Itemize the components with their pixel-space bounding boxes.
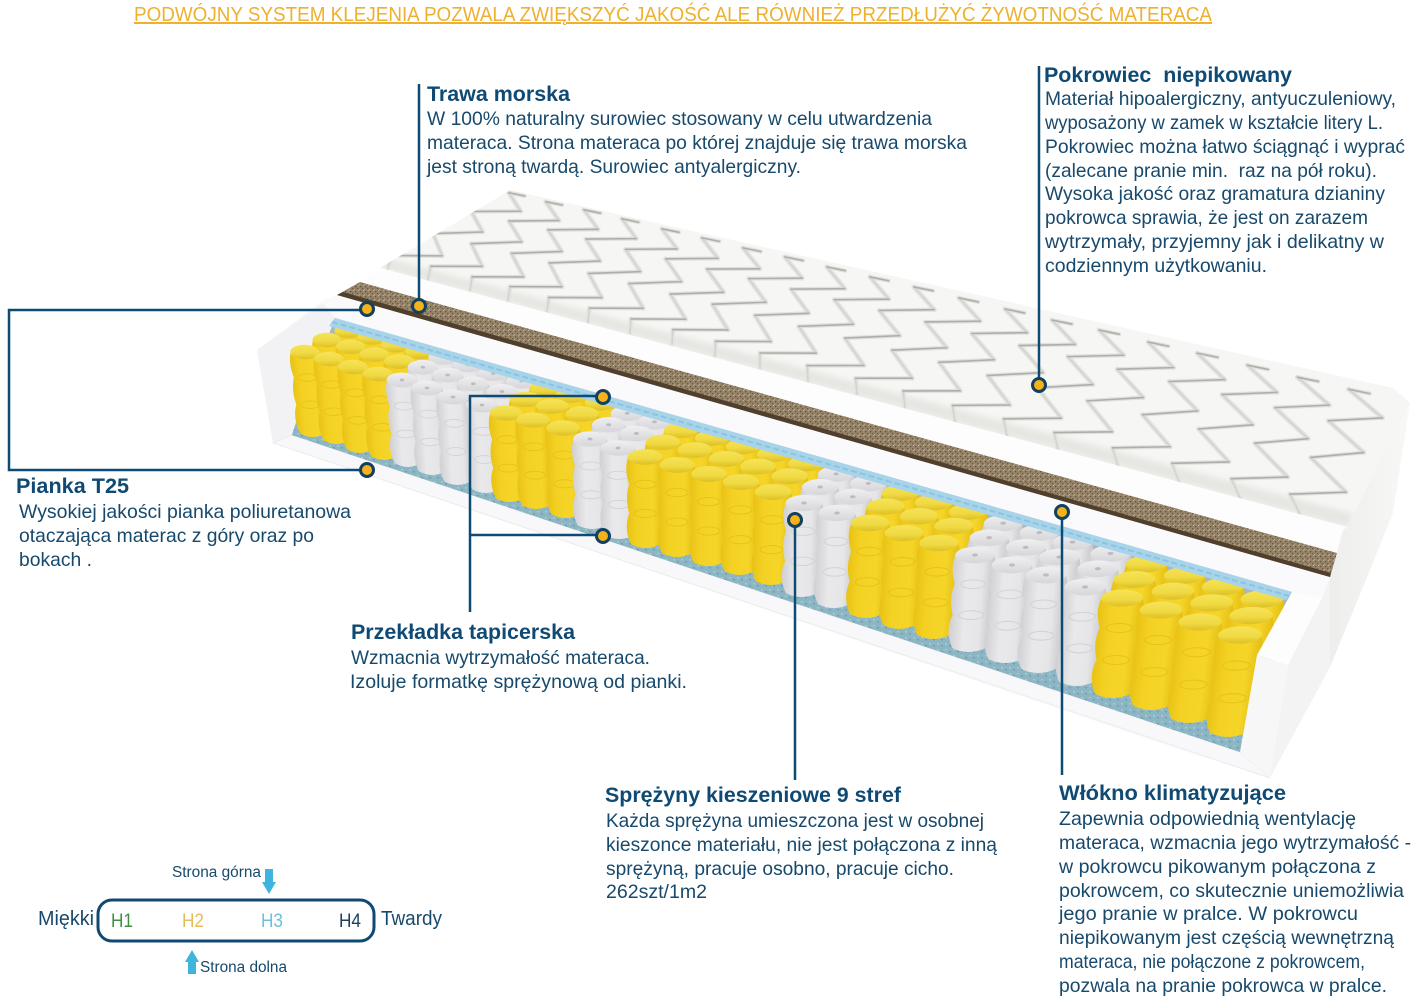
spring cavity: [292, 318, 1292, 752]
pocket springs: [288, 308, 1286, 737]
white band below quilting: [360, 268, 1347, 553]
frame lower face: [273, 435, 1270, 778]
quilted top surface: [377, 189, 1410, 527]
description: Materiał hipoalergiczny, antyuczuleniowy,: [1045, 88, 1396, 110]
label: hard: Twardy: [381, 908, 442, 930]
description: otaczająca materac z góry oraz po: [19, 525, 314, 547]
callout: Sprężyny kieszeniowe: [605, 514, 997, 903]
description: Pokrowiec można łatwo ściągnąć i wyprać: [1045, 136, 1405, 158]
marker dot upper: [596, 390, 610, 404]
heading: Włókno klimatyzujące: [1059, 782, 1286, 805]
description: [1044, 88, 1405, 277]
description: pokrowcem, co skutecznie uniemożliwia: [1059, 880, 1404, 902]
description: jest stroną twardą. Surowiec antyalergiczny.: [426, 156, 801, 178]
description: wytrzymały, przyjemny jak i delikatny w: [1044, 231, 1385, 253]
leader line: [1038, 66, 1040, 384]
frame left wall: [257, 303, 335, 443]
top blue fibre strip: [329, 318, 1292, 600]
label: bottom side: Strona dolna: [200, 959, 287, 976]
mattress cover side: [1320, 390, 1410, 672]
description: materaca, nie połączone z pokrowcem,: [1059, 951, 1365, 973]
description: niepikowanym jest częścią wewnętrzną: [1059, 927, 1394, 949]
heading: Sprężyny kieszeniowe 9 stref: [605, 784, 902, 807]
marker dot lower: [596, 530, 610, 542]
frame right block front: [1240, 655, 1288, 778]
description: [426, 108, 967, 178]
callout: Włókno klimatyzujące: [1056, 506, 1411, 997]
heading: Przekładka tapicerska: [351, 621, 575, 644]
description: materaca. Strona materaca po której znajduje się trawa morska: [427, 132, 967, 154]
description: 262szt/1m2: [606, 881, 707, 903]
frame right block top: [1257, 592, 1322, 665]
description: Zapewnia odpowiednią wentylację: [1059, 808, 1356, 830]
level H4: H4: [339, 911, 361, 932]
foam frame: [257, 295, 1330, 778]
icon: arrow up: [185, 950, 199, 974]
callout: Pianka T25: [9, 302, 374, 571]
label: soft: Miękki: [38, 908, 94, 930]
description: jego pranie w pralce. W pokrowcu: [1058, 903, 1358, 925]
description: Izoluje formatkę sprężynową od pianki.: [350, 671, 687, 693]
description: Wysoka jakość oraz gramatura dzianiny: [1045, 183, 1385, 205]
description: Każda sprężyna umieszczona jest w osobnej: [606, 810, 984, 832]
leader line: [1061, 513, 1063, 775]
description: (zalecane pranie min. raz na pół roku).: [1045, 160, 1377, 182]
marker dot lower: [360, 464, 374, 476]
frame right block side: [1270, 578, 1330, 778]
description: [19, 501, 351, 571]
title: PODWÓJNY SYSTEM KLEJENIA POZWALA ZWIĘKSZYĆ JAKOŚĆ ALE RÓWNIEŻ PRZEDŁUŻYĆ ŻYWOTNOŚĆ MATERACA: [134, 2, 1213, 26]
description: sprężyną, pracuje osobno, pracuje cicho.: [606, 858, 954, 880]
level H1: H1: [111, 911, 133, 932]
label: top side: Strona górna: [172, 864, 261, 881]
heading: Pianka T25: [16, 475, 129, 498]
description: materaca, wzmacnia jego wytrzymałość -: [1059, 832, 1411, 854]
mattress illustration: [257, 189, 1410, 778]
marker dot: [788, 514, 802, 526]
callout: Trawa morska: [412, 83, 967, 312]
marker dot: [1032, 378, 1046, 392]
scale box: [98, 900, 374, 941]
level H3: H3: [261, 911, 283, 932]
heading: Pokrowiec niepikowany: [1044, 64, 1292, 87]
description: Wzmacnia wytrzymałość materaca.: [351, 647, 650, 669]
description: [1058, 808, 1411, 997]
description: [350, 647, 687, 693]
leader line: [418, 84, 420, 305]
coconut fibre layer: [337, 282, 1337, 577]
description: pozwala na pranie pokrowca w pralce.: [1059, 975, 1387, 997]
description: Wysokiej jakości pianka poliuretanowa: [19, 501, 351, 523]
icon: arrow down: [262, 869, 276, 894]
leader bracket: [470, 396, 603, 612]
description: [606, 810, 997, 903]
description: pokrowca sprawia, że jest on zarazem: [1045, 207, 1368, 229]
description: w pokrowcu pikowanym połączona z: [1058, 856, 1376, 878]
description: codziennym użytkowaniu.: [1045, 255, 1267, 277]
marker dot: [412, 300, 426, 312]
description: wyposażony w zamek w kształcie litery L.: [1044, 112, 1383, 134]
firmness scale: [38, 864, 442, 976]
callout: Pokrowiec niepikowany: [1032, 64, 1405, 392]
bottom blue fibre strip: [292, 410, 1248, 752]
level H2: H2: [182, 911, 204, 932]
description: kieszonce materiału, nie jest połączona z inną: [606, 834, 997, 856]
description: bokach .: [19, 549, 92, 571]
leader line: [794, 521, 796, 780]
marker dot upper: [360, 302, 374, 316]
heading: Trawa morska: [427, 83, 570, 106]
callout: Przekładka tapicerska: [350, 390, 687, 693]
marker dot: [1056, 506, 1068, 518]
description: W 100% naturalny surowiec stosowany w celu utwardzenia: [427, 108, 932, 130]
leader bracket: [9, 310, 367, 470]
